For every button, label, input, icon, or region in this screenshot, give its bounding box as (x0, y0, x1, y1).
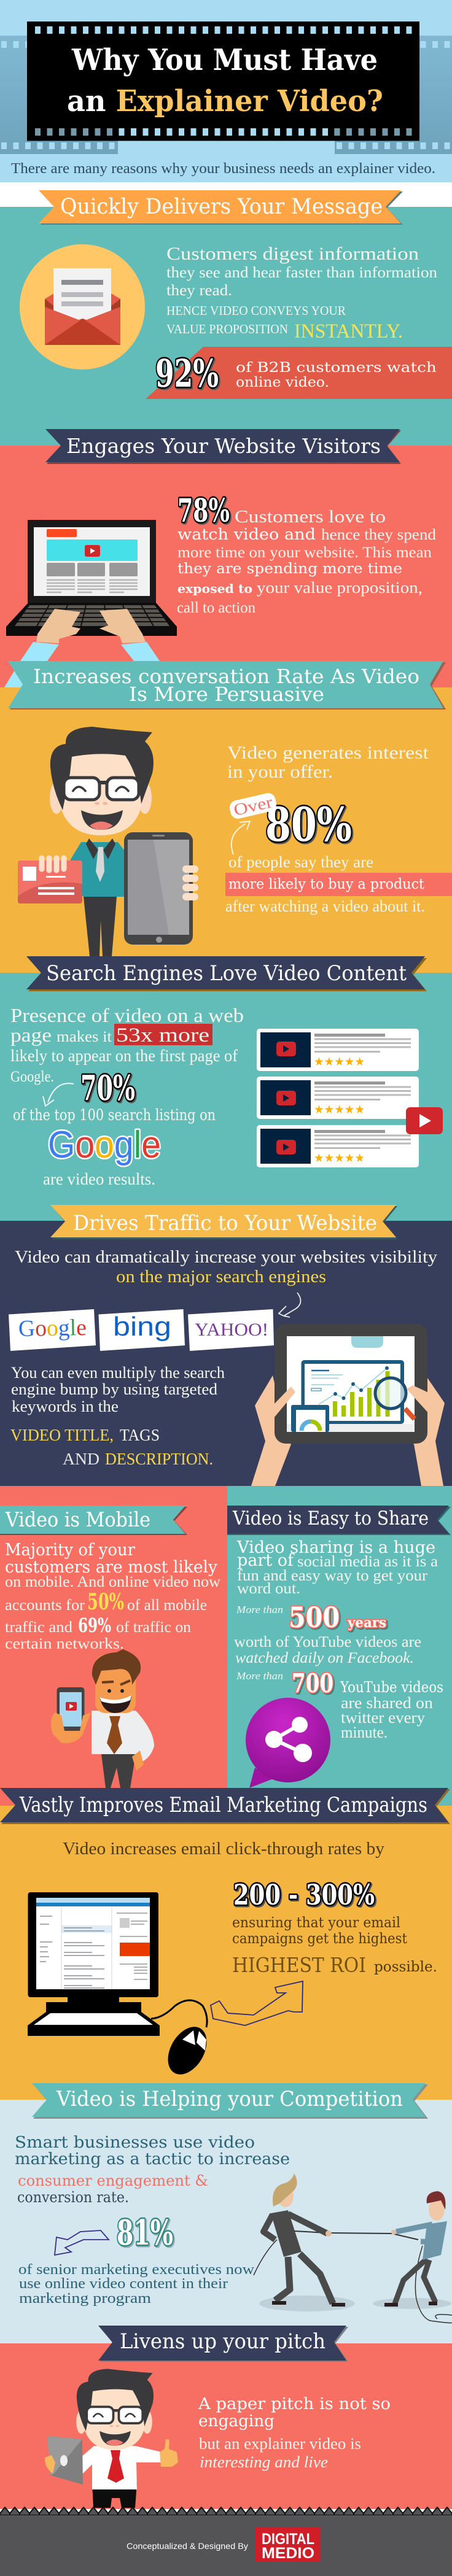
text block: 50% (87, 1589, 124, 1615)
text block: call to action (177, 600, 255, 616)
illustration: man with tablet and thumbs up (45, 2369, 178, 2508)
logo: google (9, 1309, 96, 1351)
video result cards (257, 1029, 419, 1167)
text block: 53x more (116, 1024, 209, 1046)
arrow (55, 2230, 109, 2255)
panel: livens up your pitch (0, 2343, 452, 2509)
stat: over 80% (228, 792, 352, 854)
text block: part of (237, 1551, 295, 1570)
panel: footer (0, 2507, 452, 2576)
panel: engages your website visitors (0, 446, 452, 687)
text: keywords: VIDEO TITLE, (10, 1426, 114, 1444)
title: Why You Must Have (71, 43, 378, 77)
logo: digital medio (255, 2528, 320, 2562)
text block: 69% (78, 1614, 111, 1637)
ribbon: drives traffic to your website (50, 1205, 397, 1239)
ribbon: quickly delivers your message: Quickly Delivers Your Message (60, 195, 383, 219)
text block: they see and hear faster than information (166, 265, 438, 281)
ribbon: vastly improves email marketing campaigns (0, 1788, 450, 1824)
text block: Majority of your (5, 1541, 135, 1560)
text block: HIGHEST ROI (232, 1953, 366, 1977)
text block: accounts for (5, 1597, 85, 1614)
figure: right man (384, 2191, 447, 2305)
text block (10, 1004, 244, 1188)
panel: quickly delivers your message (0, 207, 452, 446)
text block: use online video content in their (19, 2276, 228, 2292)
text block: Smart businesses use video (15, 2133, 255, 2152)
text: keywords: TAGS (120, 1426, 160, 1444)
ribbon: search engines love video content (26, 956, 427, 991)
text block: Video sharing is a huge (236, 1538, 435, 1557)
text block: of the top 100 search listing on (13, 1106, 216, 1124)
text block: traffic and (5, 1619, 73, 1636)
text block (225, 743, 452, 915)
text block: HENCE VIDEO CONVEYS YOUR (166, 303, 346, 318)
text: keywords: You can even multiply the search (11, 1364, 225, 1382)
text block (15, 2133, 290, 2307)
text: keywords: DESCRIPTION. (105, 1450, 213, 1468)
stat band: 92% (146, 347, 452, 399)
text block: INSTANTLY. (294, 320, 403, 342)
ribbon: engages your website visitors (45, 429, 401, 464)
illustration: desktop computer with email (28, 1892, 160, 2036)
ribbon: increases conversion rate: Increases conversation Rate As Video (33, 665, 419, 688)
text block: more time on your website. This mean (177, 544, 432, 561)
text block: Customers digest information (166, 244, 419, 264)
ribbon: drives traffic to your website: Drives Traffic to Your Website (73, 1211, 377, 1236)
text: keywords (10, 1364, 225, 1468)
text: visibility: on the major search engines (116, 1267, 326, 1286)
text block: of all mobile (127, 1597, 207, 1614)
google logo: Google (48, 1124, 161, 1166)
text block: ensuring that your email (232, 1915, 400, 1931)
text block: twitter every (341, 1709, 425, 1727)
text block: word out. (237, 1580, 300, 1597)
text block: Video generates interest (227, 743, 429, 763)
illustration: tug of war (254, 2173, 452, 2323)
text block: campaigns get the highest (232, 1931, 408, 1947)
stat: over 80%: Over (232, 792, 275, 819)
text block: they are spending more time (177, 561, 402, 577)
text block: Customers love to (235, 507, 386, 527)
text block: of traffic on (116, 1619, 192, 1636)
panel: video is helping your competition (0, 2100, 452, 2343)
text block: VALUE PROPOSITION (166, 322, 288, 336)
text block: 78% (177, 492, 230, 530)
illustration: man with phone and card (18, 727, 198, 956)
stat: 200 - 300%: 200 - 300% (233, 1878, 375, 1911)
text block: your value proposition, (257, 579, 423, 597)
ribbon: search engines love video content: Search Engines Love Video Content (46, 961, 407, 986)
text block: marketing as a tactic to increase (15, 2150, 290, 2168)
text block: Google. (10, 1069, 54, 1085)
ribbon: quickly delivers your message (39, 190, 403, 225)
text block (234, 1538, 443, 1741)
text block: hence they spend (321, 527, 437, 543)
text: keywords: engine bump by using targeted (11, 1380, 217, 1398)
text block: A paper pitch is not so (198, 2395, 391, 2413)
card 2 (257, 1077, 419, 1119)
arrow (211, 1981, 303, 2025)
stat band: 92%: 92% (155, 351, 219, 396)
text block: watch video and (177, 525, 316, 543)
logo: bing (98, 1309, 185, 1351)
stat: 700: 700 (292, 1668, 333, 1698)
ribbon: video is mobile (0, 1506, 187, 1535)
text block: more likely to buy a product (228, 876, 425, 892)
logo: yahoo (188, 1309, 274, 1351)
text block: exposed to (177, 581, 252, 596)
logo: digital medio: MEDIO (262, 2545, 314, 2562)
text block: on mobile. And online video now (5, 1574, 220, 1590)
text block: minute. (341, 1723, 388, 1741)
text block: of people say they are (228, 853, 373, 871)
stat: 500 years: 500 (289, 1601, 340, 1634)
text block: watched daily on Facebook. (235, 1650, 414, 1666)
credit text: Conceptualized & Designed By (127, 2541, 248, 2551)
text block: customers are most likely (5, 1558, 218, 1577)
card 3 (257, 1125, 419, 1167)
stat: 81%: 81% (117, 2213, 173, 2253)
text block: interesting and live (200, 2453, 328, 2471)
panel: header (0, 0, 452, 182)
text block (5, 1541, 220, 1652)
title: an Explainer Video? (67, 84, 383, 118)
icon: share bubble (246, 1698, 330, 1788)
stat band: 92%: of B2B customers watch (236, 360, 437, 376)
text: visibility: Video can dramatically increase your websites visibility (15, 1247, 438, 1267)
illustration: businessman with phone (51, 1649, 154, 1788)
text block: likely to appear on the first page of (10, 1046, 238, 1065)
text block: are video results. (43, 1170, 155, 1188)
card 1 (257, 1029, 419, 1071)
text block: of senior marketing executives now (18, 2262, 255, 2278)
text block: conversion rate. (17, 2189, 129, 2206)
logo: google: Google (18, 1315, 87, 1342)
text block (166, 244, 438, 342)
icon: envelope in circle (20, 244, 145, 369)
logo: yahoo: YAHOO! (195, 1320, 268, 1340)
text block: makes it (56, 1029, 112, 1045)
card 1: ★★★★★ (314, 1055, 365, 1069)
ribbon: increases conversion rate (8, 661, 446, 710)
illustration: hands holding tablet (251, 1324, 445, 1486)
text: visibility (15, 1247, 438, 1286)
search engine logos (9, 1309, 274, 1351)
text block: they read. (166, 282, 232, 299)
ribbon: video is mobile: Video is Mobile (5, 1507, 150, 1531)
arrow (43, 1083, 74, 1106)
title (67, 43, 383, 118)
text block: certain networks. (5, 1636, 124, 1652)
ribbon: video is helping your competition (32, 2083, 428, 2119)
text block: fun and easy way to get your (237, 1568, 428, 1584)
white gap (0, 182, 452, 207)
panel: vastly improves email marketing campaigns (0, 1806, 452, 2100)
stat: over 80%: 80% (265, 797, 352, 852)
panel: drives traffic to your website (0, 1221, 452, 1486)
text block: More than (236, 1604, 283, 1615)
text block: are shared on (341, 1694, 433, 1712)
text block: consumer engagement & (18, 2172, 208, 2189)
ribbon: livens up your pitch (98, 2326, 348, 2362)
ribbon: increases conversion rate: Is More Persuasive (129, 683, 324, 706)
arrow (279, 1293, 301, 1317)
text block: in your offer. (227, 762, 333, 782)
film strip background (0, 36, 452, 154)
intro text: Video increases email click-through rates by (63, 1839, 384, 1859)
text: keywords: keywords in the (12, 1398, 119, 1415)
title film frame (27, 21, 419, 141)
logo: bing: bing (113, 1312, 171, 1342)
text block: More than (236, 1670, 283, 1682)
panel: search engines love video content (0, 973, 452, 1221)
text block: engaging (198, 2412, 275, 2431)
card 2: ★★★★★ (314, 1103, 365, 1116)
ribbon: video is helping your competition: Video is Helping your Competition (56, 2087, 403, 2111)
text block: social media as it is a (297, 1553, 438, 1570)
text block: but an explainer video is (199, 2435, 361, 2453)
panel: video is easy to share (227, 1486, 452, 1806)
panel: increases conversion rate (0, 687, 452, 973)
logo: digital medio: DIGITAL (262, 2531, 314, 2548)
text block: worth of YouTube videos are (234, 1634, 421, 1650)
text block: Presence of video on a web (10, 1004, 244, 1026)
text block: page (10, 1024, 52, 1046)
icon: large play button (406, 1107, 443, 1134)
ribbon: video is easy to share: Video is Easy to Share (232, 1507, 429, 1530)
stat: 70%: 70% (80, 1068, 135, 1108)
ribbon: livens up your pitch: Livens up your pitch (120, 2329, 325, 2354)
panel: video is mobile (0, 1486, 227, 1806)
stat band: 92%: online video. (236, 375, 329, 390)
text: keywords: AND (63, 1450, 99, 1468)
intro text: There are many reasons why your business needs an explainer video. (11, 161, 435, 177)
text block: possible. (374, 1959, 437, 1975)
figure: left man (263, 2173, 345, 2305)
stat: 500 years: years (347, 1615, 386, 1631)
text block (198, 2395, 391, 2471)
card 3: ★★★★★ (314, 1151, 365, 1165)
icon: laptop with typing hands (4, 520, 177, 687)
text block: after watching a video about it. (225, 897, 425, 915)
icon: mouse with cable (151, 2000, 214, 2081)
text block: marketing program (19, 2291, 151, 2307)
text block (232, 1915, 437, 1977)
text block (177, 492, 437, 616)
stat: 500 years (289, 1601, 386, 1634)
ribbon: engages your website visitors: Engages Your Website Visitors (66, 434, 381, 458)
